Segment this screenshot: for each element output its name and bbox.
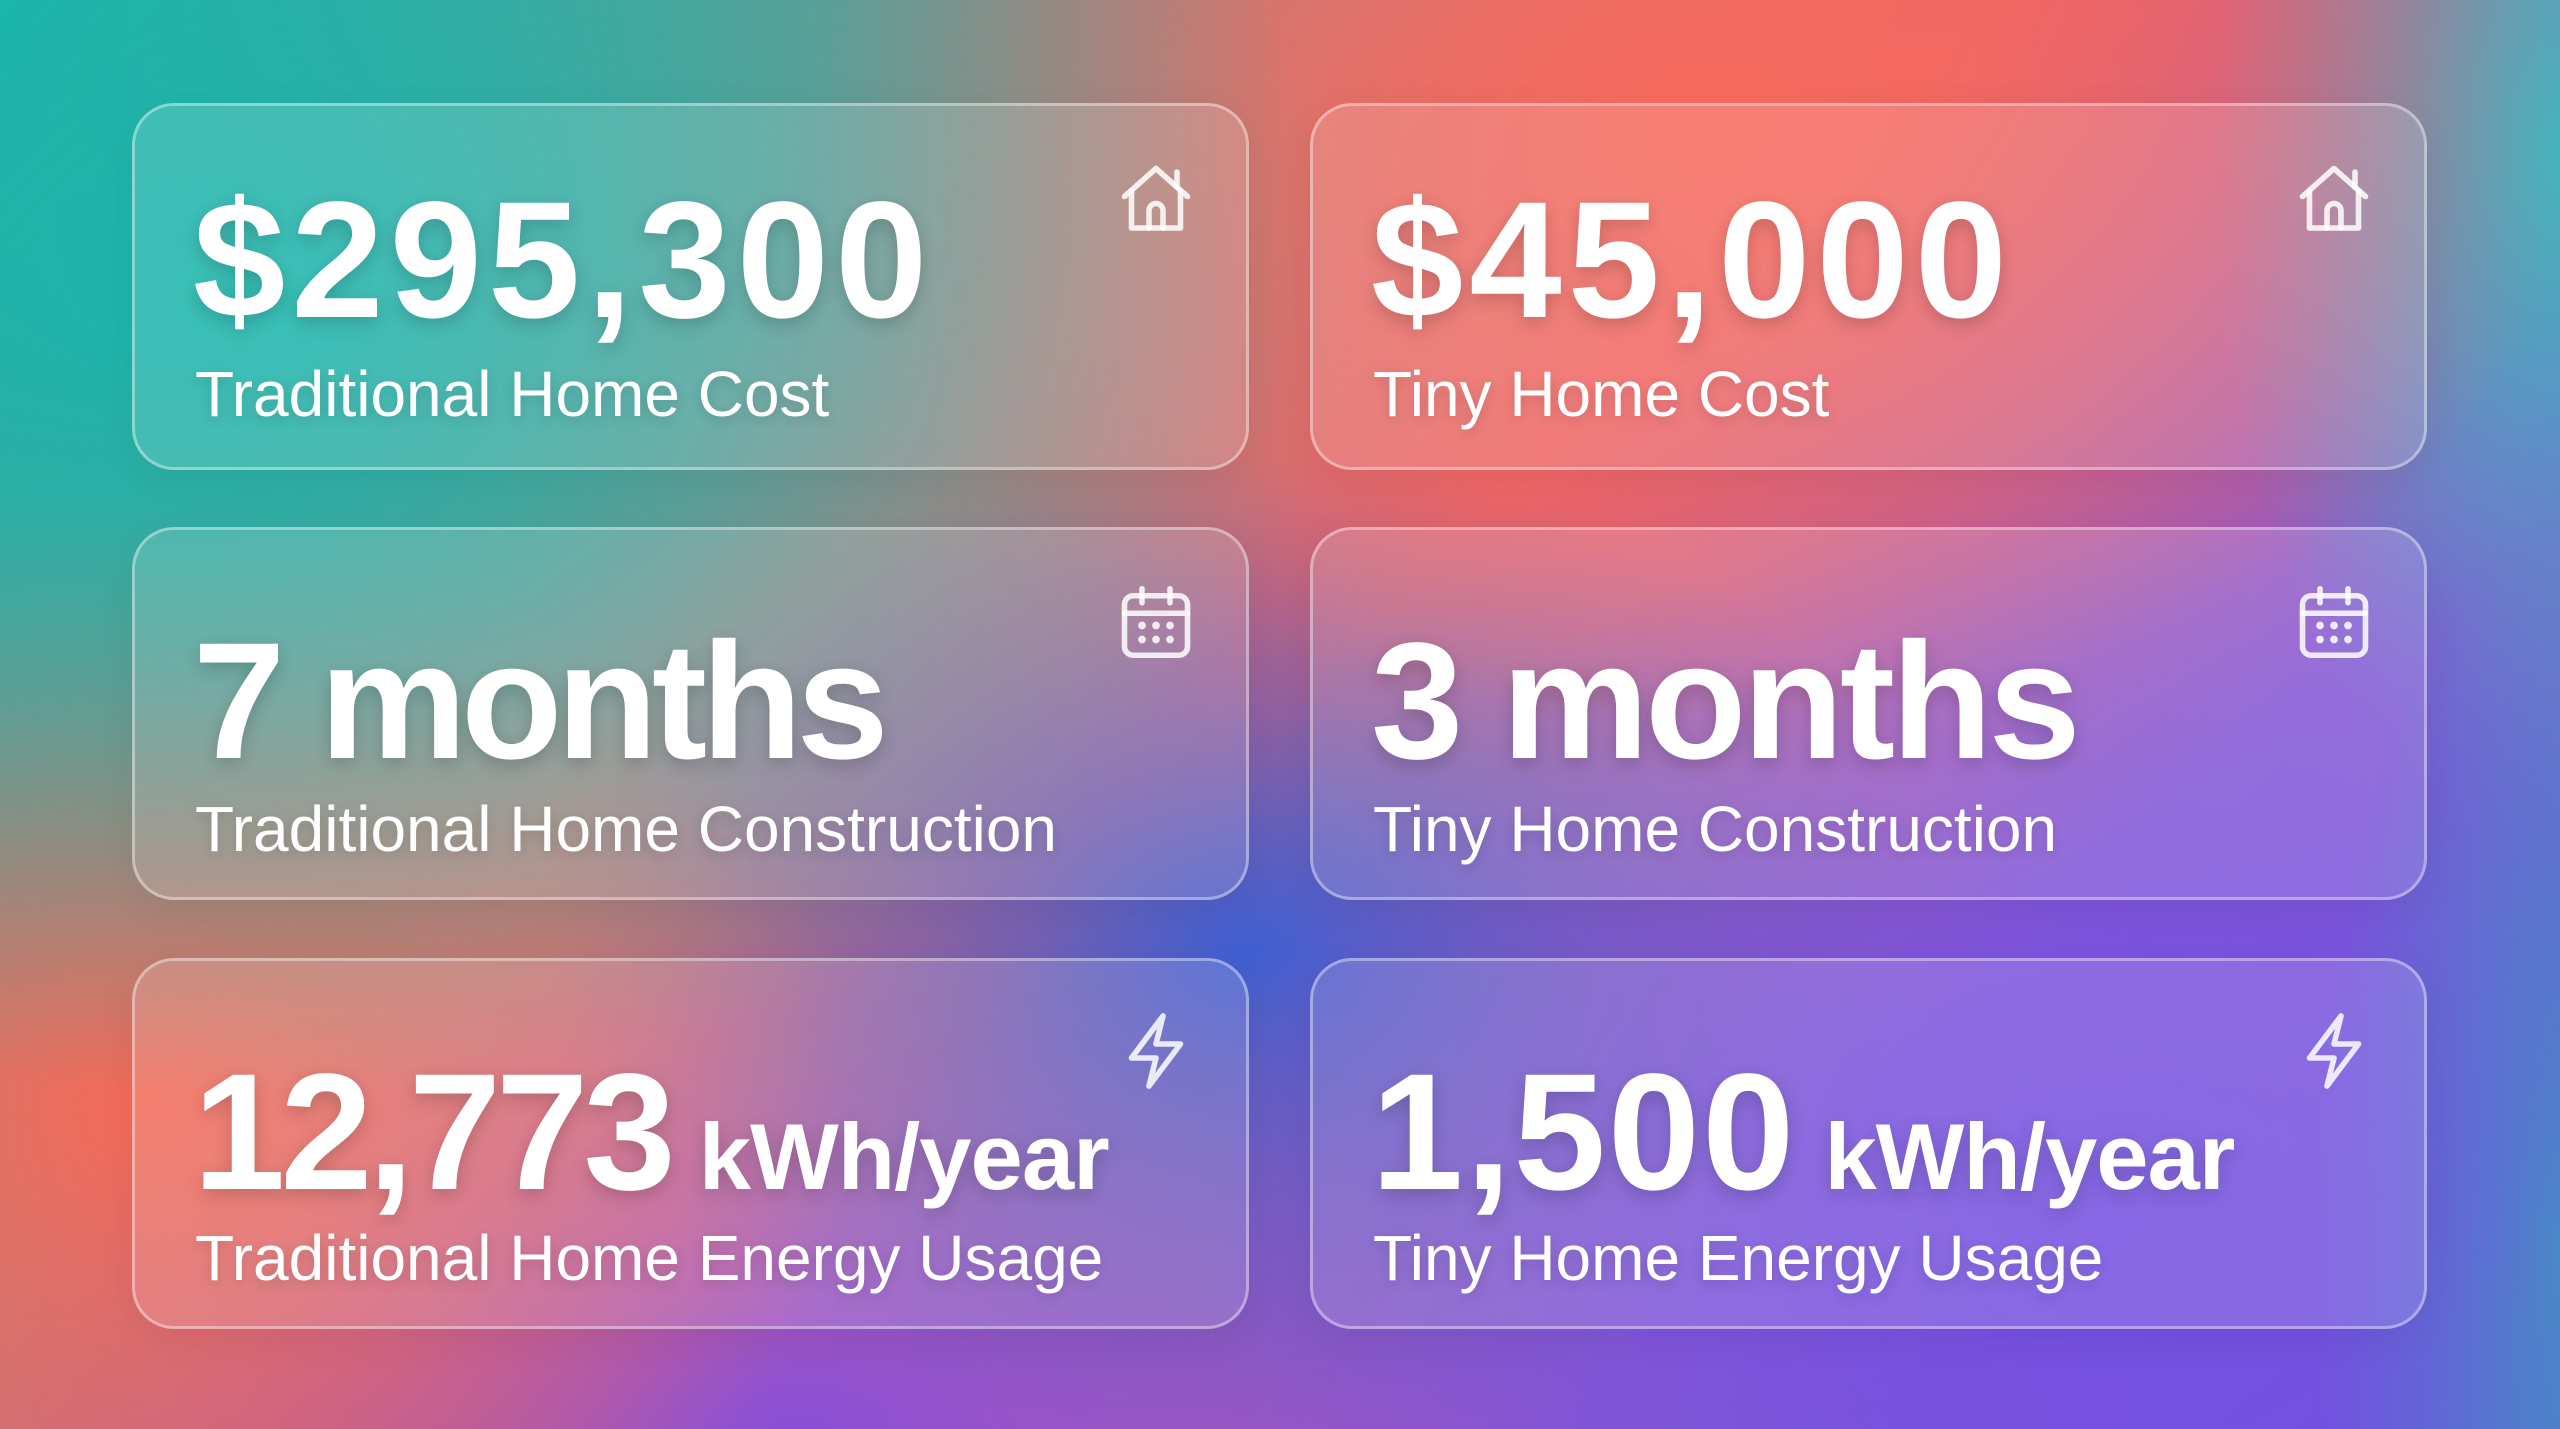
card: tiny energy (1310, 958, 2427, 1329)
icon: calendar (2300, 586, 2368, 658)
label: Traditional Home Construction (195, 793, 1057, 865)
value: 3 months: 3 months (1371, 609, 2077, 794)
icon: house (2300, 166, 2368, 231)
icon: lightning bolt (2306, 1013, 2362, 1089)
label: Tiny Home Cost (1373, 358, 1829, 430)
label: Traditional Home Energy Usage (195, 1222, 1103, 1294)
value: 295,300: $295,300 (193, 168, 933, 353)
card: traditional home cost (132, 103, 1249, 470)
card: traditional energy (132, 958, 1249, 1329)
value: 7 months: 7 months (193, 609, 883, 794)
label: Tiny Home Construction (1373, 793, 2057, 865)
card: tiny construction (1310, 527, 2427, 900)
card: tiny home cost (1310, 103, 2427, 470)
label: Traditional Home Cost (195, 358, 829, 430)
label: Tiny Home Energy Usage (1373, 1222, 2103, 1294)
icon: calendar (1122, 586, 1190, 658)
value: 12,773 kWh/year: 12,773 kWh/year (193, 1040, 1109, 1225)
card: traditional construction (132, 527, 1249, 900)
value: 1,500 kWh/year: 1,500 kWh/year (1371, 1040, 2234, 1225)
value: 45,000: $45,000 (1371, 168, 2013, 353)
icon: lightning bolt (1128, 1013, 1184, 1089)
icon: house (1122, 166, 1190, 231)
